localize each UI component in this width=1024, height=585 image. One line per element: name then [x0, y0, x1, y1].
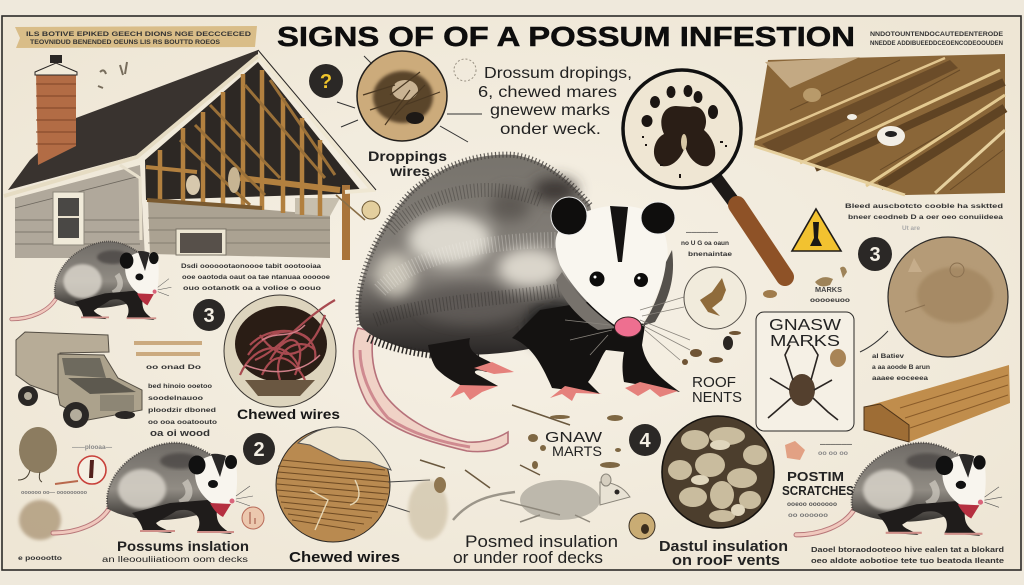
- fur strands: [375, 190, 560, 320]
- text block: bottom right: Daoel btoraodooteoo hive ealen tat a blokard: [811, 547, 1004, 554]
- badge: question mark: ?: [320, 71, 332, 93]
- feet: [450, 362, 678, 401]
- small note under attic: Ut are: [902, 225, 920, 232]
- label: droppings wires: Droppings: [368, 148, 447, 164]
- wood ball: [362, 201, 380, 219]
- roof vent circle: [684, 267, 746, 329]
- small note: marks: bnenaintae: [688, 251, 732, 258]
- note: top right text: [870, 31, 1004, 47]
- possum: lower left: [53, 443, 253, 534]
- label: droppings wires: [368, 148, 447, 179]
- small caption: bottom left: e pooootto: [18, 556, 62, 562]
- icon: truck: [16, 332, 142, 428]
- banner: top left note: TEOVNIDUD BENENDED OEUNS LIS RS BOUTTD ROEOS: [30, 39, 221, 46]
- small note under attic: Bleed auscbotcto cooble ha ssktted: [845, 203, 1003, 210]
- small note: marks: [681, 229, 732, 258]
- body: [358, 155, 610, 355]
- small note right: [872, 353, 930, 382]
- sand circle with rodent: [860, 237, 1008, 357]
- label: roof vents: ROOF: [692, 374, 736, 391]
- small note right: a aa aoode B arun: [872, 364, 930, 371]
- chewed wires circle: [224, 295, 336, 407]
- small note: specimen: ——plooaa—: [72, 444, 112, 451]
- small note under attic: bneer ceodneb D a oer oeo conuiideea: [848, 214, 1003, 221]
- front legs: [512, 300, 680, 394]
- text block: truck notes: [134, 343, 217, 438]
- head: [556, 206, 668, 326]
- title: SIGNS OF OF A POSSUM INFESTION: [277, 21, 855, 52]
- attic joists: [754, 54, 1005, 195]
- small note: scratches: ——————: [820, 441, 852, 448]
- small note right: al Batiev: [872, 353, 904, 360]
- small note beside upper possum: ouo ootanotk oa a volioe o oouo: [183, 285, 321, 292]
- small note: scratches: [818, 441, 852, 457]
- badge: number 2: 2: [253, 439, 265, 461]
- label: possum scratches: POSTIM: [787, 469, 844, 484]
- label: dastul insulation: [659, 539, 788, 569]
- fascia right: [258, 54, 372, 192]
- panel: gnaw marks card with bug: [756, 312, 854, 431]
- small note beside upper possum: Dsdi ooooootaonoooe tabit oootooiaa: [181, 263, 321, 270]
- text block: droppings description: Drossum dropings,: [484, 65, 632, 82]
- lower wall: [148, 200, 330, 258]
- small round icon: [242, 507, 264, 529]
- label: roof vents: NENTS: [692, 389, 742, 406]
- right post: [342, 185, 350, 260]
- lower window: [176, 229, 226, 255]
- red circle icon: [55, 456, 106, 484]
- small note beside upper possum: ooe oaotoda oaut oa tae ntanuaa oooooe: [182, 274, 330, 281]
- fascia left: [4, 56, 258, 196]
- attic interior: [145, 62, 362, 200]
- debris patch: [408, 405, 570, 540]
- label: possum scratches: SCRATCHES: [782, 483, 854, 498]
- scattered debris: marks: MARKS: [815, 285, 842, 294]
- badge: number 3 left: 3: [203, 305, 215, 327]
- text block: bottom right: oeo aldote aobotioe tete tuo beatoda Ileante: [811, 558, 1004, 565]
- banner: top left note: [15, 26, 257, 48]
- small acorn icon: [629, 513, 655, 539]
- badge: number 3 right: 3: [869, 244, 881, 266]
- icon: spider: [768, 345, 838, 420]
- ears: [551, 197, 587, 235]
- badge: number 4: 4: [639, 430, 651, 452]
- label: gnaw marts: GNAW: [545, 429, 603, 446]
- scattered debris: marks: ooooeuoo: [810, 297, 850, 304]
- label: gnaw marts: [545, 429, 603, 459]
- forehead stripe: [610, 206, 628, 262]
- label: possums insulation: [102, 539, 249, 564]
- possum: upper left: [11, 241, 171, 320]
- text block: truck notes: ploodzir dboned: [148, 407, 216, 414]
- text block: truck notes: soodelnauoo: [148, 395, 203, 402]
- magnifying glass with paw print: [623, 70, 785, 277]
- tail: [353, 328, 508, 452]
- small caption: specimen: oooooo oo— ooooooooo: [21, 490, 88, 496]
- small note beside upper possum: [181, 263, 330, 292]
- small note right: aaaee eoceeea: [872, 375, 928, 382]
- whiskers: [565, 297, 690, 360]
- side window: [53, 192, 84, 245]
- wood log: [864, 365, 1010, 442]
- label: possums insulation: an lleoouliiatioom oom decks: [102, 555, 248, 564]
- badge: number 3 left: [193, 299, 225, 331]
- exposed studs: [146, 70, 340, 216]
- big possum: [353, 155, 690, 452]
- badge: number 3 right: [858, 237, 892, 271]
- text block: droppings description: [478, 65, 632, 138]
- roof: [8, 50, 258, 190]
- chimney: [36, 72, 76, 165]
- label: dastul insulation: on rooF vents: [672, 553, 780, 569]
- banner: top left note: ILS BOTIVE EPIKED GEECH DIONS NGE DECCCECED: [26, 31, 251, 38]
- label: dastul insulation: Dastul insulation: [659, 539, 788, 555]
- fur outline: [358, 155, 590, 325]
- downpipe: [120, 165, 141, 240]
- label: chewed wires upper: Chewed wires: [237, 406, 340, 422]
- debris: roof vents: [682, 331, 741, 365]
- nest debris: [830, 349, 846, 367]
- siding: [15, 165, 145, 258]
- note: top right text: NNEDDE ADDIBUEEDDCEOENCODEOOUDEN: [870, 40, 1003, 47]
- brown blob specimen: [18, 427, 57, 482]
- card heading second line: MARKS: [770, 333, 840, 350]
- text block: droppings description: onder weck.: [500, 121, 601, 138]
- card heading: GNASW: [769, 317, 842, 334]
- nose: [614, 317, 642, 337]
- scattered debris: marks: [763, 267, 850, 304]
- note: top right text: NNDOTOUNTENDOCAUTEDENTERODE: [870, 31, 1004, 38]
- label: posmed insulation: or under roof decks: [453, 548, 603, 567]
- specks: [98, 62, 127, 88]
- droppings circle: [337, 51, 482, 142]
- label: chewed wires lower: Chewed wires: [289, 549, 400, 566]
- light fur patches: [375, 178, 585, 347]
- small note: marks: ——————: [686, 229, 718, 236]
- label: roof vents: [692, 374, 742, 406]
- house illustration: [4, 50, 380, 260]
- fur scrap: [19, 500, 61, 540]
- possum: lower right: [796, 443, 1002, 536]
- gray rat sketch: [453, 474, 630, 522]
- small note: marks: no U G oa oaun: [681, 240, 729, 247]
- text block: droppings description: gnewew marks: [490, 102, 610, 119]
- scattered debris: gnaw: [528, 415, 623, 469]
- small note: scratches: oo oo oo: [818, 450, 848, 457]
- badge: question mark: [309, 64, 343, 98]
- label: droppings wires: wires: [389, 163, 430, 179]
- small note under attic: [845, 203, 1003, 232]
- text block: truck notes: bed hinoio ooetoo: [148, 383, 212, 390]
- text block: bottom right: [811, 547, 1004, 565]
- label: possum scratches: oo oooooo: [788, 512, 828, 519]
- badge: number 4: [629, 424, 661, 456]
- label: possum scratches: ooeoo ooooooo: [787, 501, 837, 508]
- insulation circle: [662, 416, 774, 528]
- hind leg: [428, 338, 510, 390]
- label: possum scratches: [782, 469, 854, 519]
- label: gnaw marts: MARTS: [552, 443, 602, 459]
- warning triangle: [792, 209, 841, 251]
- eyes: [590, 272, 604, 286]
- text block: truck notes: oo onad Do: [146, 364, 201, 371]
- icon: pink scrap: [785, 441, 805, 460]
- text block: truck notes: oo ooa ooatoouto: [148, 419, 217, 426]
- text block: truck notes: oa oi wood: [150, 428, 210, 438]
- wood damage circle: [276, 427, 430, 542]
- text block: droppings description: 6, chewed mares: [478, 84, 617, 101]
- label: possums insulation: Possums inslation: [117, 539, 249, 554]
- label: posmed insulation: [453, 532, 618, 567]
- badge: number 2: [243, 433, 275, 465]
- label: posmed insulation: Posmed insulation: [465, 532, 618, 551]
